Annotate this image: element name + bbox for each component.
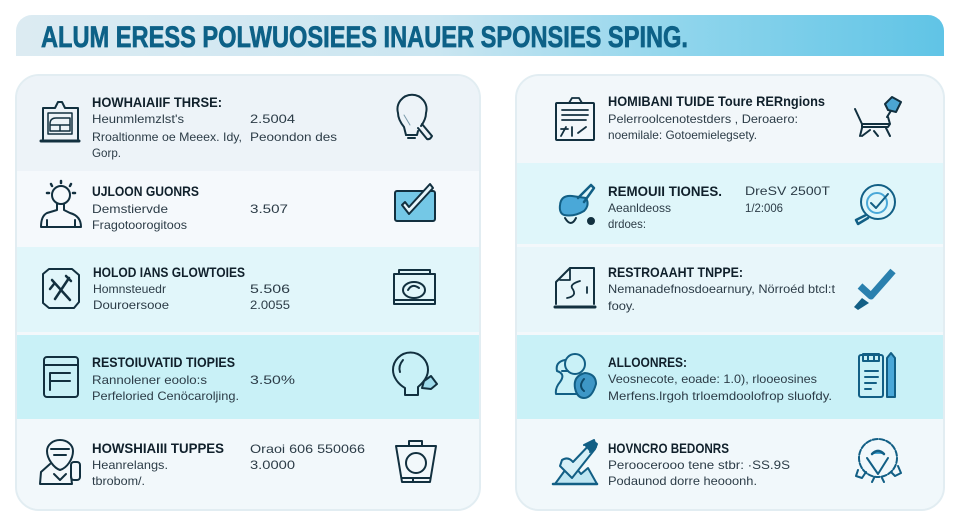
- row 2 background: [517, 163, 943, 244]
- row 4 right: [556, 353, 895, 403]
- row 1 left: [41, 94, 432, 160]
- row 2 left: [41, 181, 435, 232]
- text: row 2 right: drdoes:: [608, 217, 646, 231]
- row 3 right: [555, 264, 893, 313]
- title banner: ALUM ERESS POLWUOSIEES INAUER SPONSIES SPING.: [41, 21, 688, 54]
- row 3 left: [43, 264, 435, 312]
- text: row 4 left: 3.50%: [250, 373, 295, 387]
- text: row 2 right: REMOUII TIONES.: [608, 183, 722, 199]
- text: row 2 left: 3.507: [250, 202, 288, 216]
- text: row 3 right: Nemanadefnosdoearnury, Nörroéd btcl:t: [608, 282, 836, 296]
- icon: person with idea: [41, 181, 81, 227]
- text: row 1 left: [92, 94, 337, 160]
- text: row 4 left: RESTOIUVATID TIOPIES: [92, 354, 235, 370]
- row 5 right: [553, 439, 901, 488]
- row 5 left: [40, 440, 436, 488]
- row 2 background: [17, 171, 479, 247]
- icon: document with sketch: [555, 268, 595, 307]
- text: row 3 right: RESTROAAHT TNPPE:: [608, 264, 743, 280]
- text: row 5 left: Oraoi 606 550066: [250, 442, 365, 456]
- row 4 left: [44, 352, 437, 403]
- text: row 3 left: Homnsteuedr: [93, 282, 166, 296]
- row 2 right: [560, 183, 895, 231]
- text: row 1 left: Peoondon des: [250, 130, 337, 144]
- row 1 background: [17, 76, 479, 171]
- text: row 3 left: HOLOD IANS GLOWTOIES: [93, 264, 245, 280]
- text: row 5 left: Heanrelangs.: [92, 458, 168, 472]
- text: row 2 right: Aeanldeoss: [608, 201, 671, 215]
- icon: framed photo: [394, 270, 435, 304]
- icon: document window: [44, 357, 78, 397]
- text: row 1 left: 2.5004: [250, 112, 295, 126]
- text: row 2 left: [92, 183, 288, 232]
- icon: people with badge: [556, 354, 596, 398]
- text: row 5 right: [608, 440, 790, 488]
- text: row 3 left: [93, 264, 290, 312]
- text: row 3 left: 5.506: [250, 282, 290, 296]
- icon: clipboard house: [41, 102, 79, 141]
- text: row 5 left: 3.0000: [250, 458, 295, 472]
- icon: check over mountains: [553, 440, 597, 484]
- row 5 background: [17, 419, 479, 509]
- icon: washing bin: [396, 441, 436, 482]
- text: row 1 left: Heunmlemzlst's: [92, 112, 184, 126]
- row 1 right: [556, 93, 901, 142]
- panel: left column: [16, 75, 480, 510]
- text: row 5 right: HOVNCRO BEDONRS: [608, 440, 729, 456]
- icon: magnifier check: [856, 185, 895, 224]
- row 5 background: [517, 419, 943, 509]
- text: row 1 right: [608, 93, 825, 142]
- icon: clipboard chart: [556, 98, 594, 140]
- text: row 1 left: HOWHAIAIIF THRSE:: [92, 94, 222, 110]
- icon: notepad and pencil: [859, 353, 895, 397]
- row 4 background: [17, 335, 479, 419]
- text: row 1 right: HOMIBANI TUIDE Toure RERngions: [608, 93, 825, 109]
- text: row 3 left: 2.0055: [250, 298, 290, 312]
- panel: right column: [516, 75, 944, 510]
- text: row 2 left: Fragotoorogitoos: [92, 218, 187, 232]
- icon: tools badge: [43, 269, 79, 308]
- icon: blue check mark: [854, 271, 893, 310]
- text: row 1 right: noemilale: Gotoemielegsety.: [608, 128, 757, 142]
- text: row 3 right: [608, 264, 836, 313]
- text: row 2 left: UJLOON GUONRS: [92, 183, 199, 199]
- text: row 2 right: DreSV 2500T: [745, 184, 831, 198]
- row 3 background: [517, 247, 943, 332]
- text: row 4 right: [608, 354, 832, 403]
- icon: person with mask: [40, 440, 80, 484]
- icon: check box: [395, 184, 435, 221]
- text: row 5 right: Podaunod dorre heooonh.: [608, 474, 757, 488]
- text: row 4 left: Rannolener eoolo:s: [92, 373, 207, 387]
- text: row 3 left: Douroersooe: [93, 298, 169, 312]
- row 1 background: [517, 76, 943, 163]
- icon: blue shovel: [560, 185, 594, 224]
- row 3 background: [17, 247, 479, 332]
- text: row 5 left: [92, 440, 365, 488]
- text: row 5 right: Peroocerooo tene stbr: ·SS.9S: [608, 458, 790, 472]
- icon: award ribbon: [856, 439, 901, 482]
- icon: lounge chair: [855, 97, 901, 136]
- text: row 5 left: HOWSHIAIII TUPPES: [92, 440, 224, 456]
- text: row 4 left: [92, 354, 295, 403]
- icon: light bulb with magnifier: [398, 95, 432, 139]
- text: row 4 left: Perfeloried Cenöcaroljing.: [92, 389, 239, 403]
- text: row 2 right: [608, 183, 831, 231]
- text: row 3 right: fooy.: [608, 299, 635, 313]
- text: row 1 right: Pelerroolcenotestders , Deroaero:: [608, 112, 798, 126]
- text: row 2 left: Demstiervde: [92, 202, 168, 216]
- text: row 4 right: Veosnecote, eoade: 1.0), rlooeosines: [608, 372, 817, 386]
- text: row 5 left: tbrobom/.: [92, 474, 145, 488]
- icon: bulb head: [393, 352, 437, 395]
- text: row 4 right: Merfens.lrgoh trloemdoolofrop sluofdy.: [608, 389, 832, 403]
- text: row 2 right: 1/2:006: [745, 201, 783, 215]
- text: row 4 right: ALLOONRES:: [608, 354, 687, 370]
- text: row 1 left: Rroaltionme oe Meeex. Idy,: [92, 130, 242, 144]
- text: row 1 left: Gorp.: [92, 146, 121, 160]
- row 4 background: [517, 335, 943, 419]
